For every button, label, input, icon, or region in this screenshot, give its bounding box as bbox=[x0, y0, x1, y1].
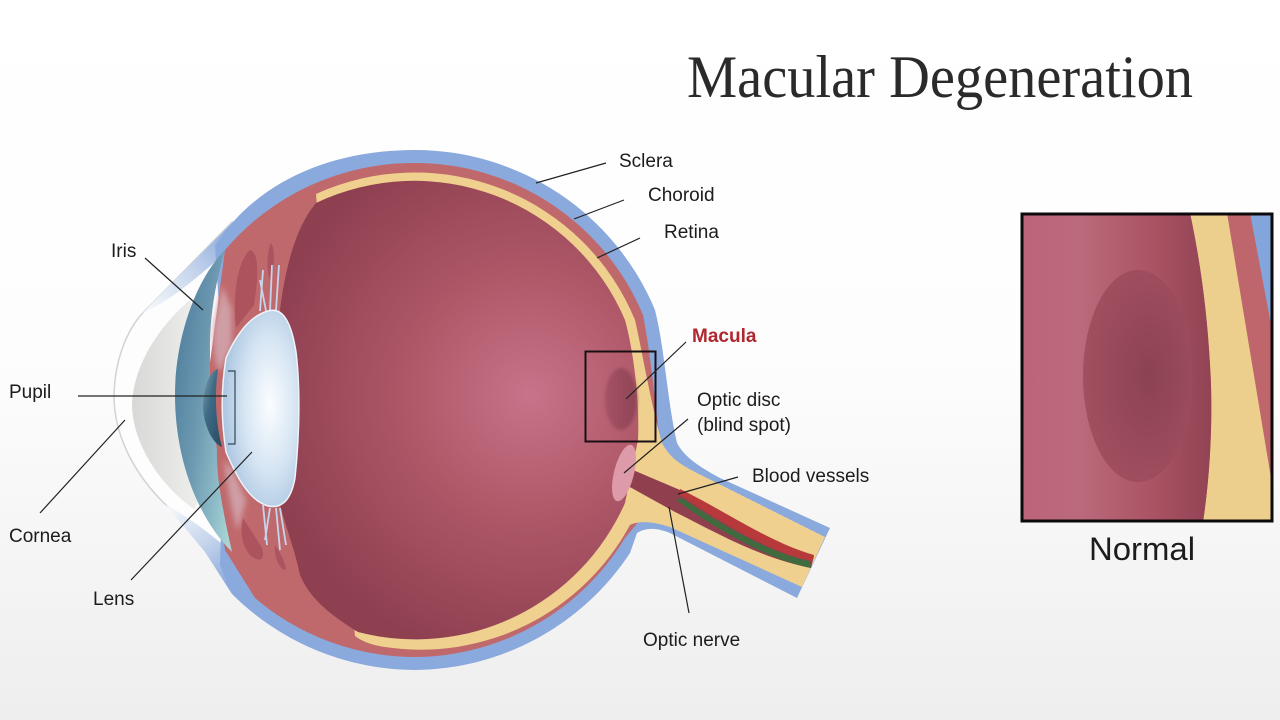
optic disc bbox=[607, 442, 641, 504]
ciliary muscle bbox=[235, 243, 286, 570]
macula enlarged bbox=[1083, 270, 1180, 482]
labels bbox=[9, 151, 869, 651]
choroid bbox=[205, 163, 660, 657]
labels: Optic disc bbox=[697, 390, 780, 411]
aqueous humour bbox=[132, 300, 225, 510]
labels: Retina bbox=[664, 222, 719, 243]
labels: Blood vessels bbox=[752, 466, 869, 487]
eye cross-section diagram bbox=[114, 150, 830, 670]
labels: Cornea bbox=[9, 526, 72, 547]
leader lines bbox=[40, 163, 738, 613]
labels: Optic nerve bbox=[643, 630, 740, 651]
vitreous body bbox=[280, 181, 638, 639]
labels: (blind spot) bbox=[697, 415, 791, 436]
zonule fibres bbox=[260, 265, 286, 550]
sclera bbox=[215, 150, 830, 670]
ciliary body shading bbox=[213, 285, 246, 530]
sclera corner bbox=[1250, 216, 1270, 322]
cornea edge tint top bbox=[143, 222, 233, 313]
cornea edge tint bottom bbox=[165, 504, 235, 594]
iris band bbox=[175, 250, 232, 552]
retina band bbox=[1190, 213, 1273, 522]
labels: Iris bbox=[111, 241, 136, 262]
cornea bbox=[114, 222, 260, 566]
macula inset box bbox=[586, 352, 656, 442]
optic nerve vessels bbox=[628, 470, 814, 568]
labels: Lens bbox=[93, 589, 134, 610]
pupil bracket bbox=[228, 371, 235, 444]
panel caption: Normal bbox=[1089, 531, 1195, 567]
labels: Choroid bbox=[648, 185, 715, 206]
retina bbox=[316, 172, 825, 650]
lens bbox=[222, 310, 299, 507]
panel: normal macula close-up bbox=[1021, 213, 1273, 522]
labels: Sclera bbox=[619, 151, 673, 172]
vitreous background bbox=[1021, 213, 1211, 522]
macula bbox=[605, 368, 637, 430]
title: Macular Degeneration bbox=[687, 44, 1193, 110]
pupil bbox=[203, 369, 222, 447]
labels: Pupil bbox=[9, 382, 51, 403]
labels: Macula bbox=[692, 326, 757, 347]
